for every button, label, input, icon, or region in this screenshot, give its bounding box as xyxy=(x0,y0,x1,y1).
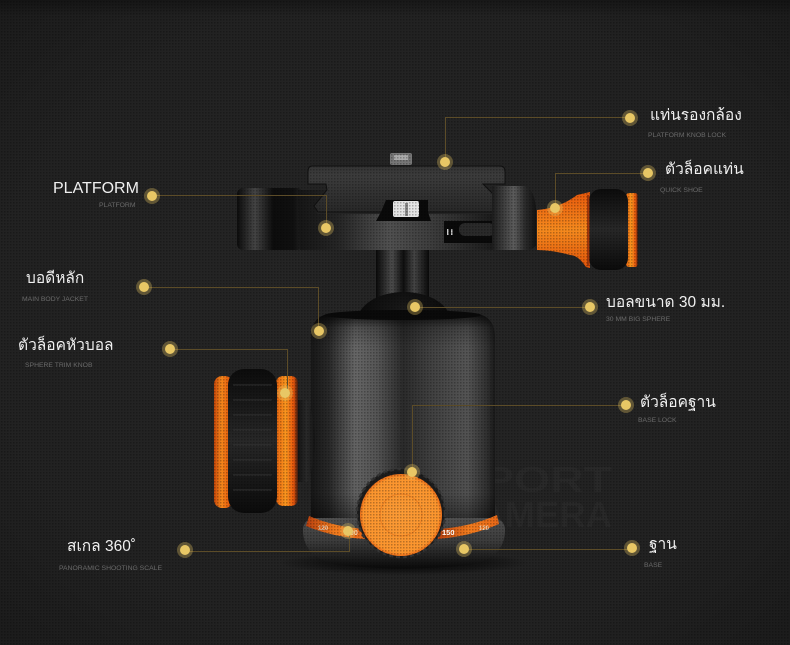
label: base lock: ตัวล็อคฐาน xyxy=(640,392,716,411)
label: platform knob lock xyxy=(648,107,742,139)
quick shoe knob xyxy=(537,189,638,270)
label: platform knob lock: แท่นรองกล้อง xyxy=(650,107,742,124)
label: main body jacket: MAIN BODY JACKET xyxy=(22,296,88,303)
sphere trim knob xyxy=(214,369,315,513)
label: sphere trim knob: SPHERE TRIM KNOB xyxy=(25,362,93,369)
label: panoramic scale: PANORAMIC SHOOTING SCALE xyxy=(59,565,162,572)
base xyxy=(303,518,505,568)
panoramic scale ring: 150 xyxy=(442,528,455,537)
lever slot xyxy=(444,221,495,243)
marker: base lock label xyxy=(618,397,634,413)
label: quick shoe: ตัวล็อคแท่น xyxy=(665,159,744,178)
panoramic scale ring: 120 xyxy=(318,526,329,532)
product: ball head xyxy=(214,153,638,575)
label: quick shoe: QUICK SHOE xyxy=(660,187,703,194)
platform top plate xyxy=(308,166,505,212)
label: panoramic scale xyxy=(59,538,162,572)
label: base lock: BASE LOCK xyxy=(638,417,677,424)
label: base xyxy=(644,536,677,569)
stem and ball xyxy=(357,248,451,352)
label: panoramic scale: สเกล 360˚ xyxy=(67,538,136,555)
main body xyxy=(311,310,495,525)
marker: knob lock on plate xyxy=(437,154,453,170)
leader lines xyxy=(144,118,648,552)
platform clamp xyxy=(237,188,500,250)
marker: main body label xyxy=(136,279,152,295)
marker: platform on clamp xyxy=(318,220,334,236)
marker: big sphere on ball xyxy=(407,299,423,315)
watermark xyxy=(452,459,612,535)
panoramic scale ring: 90 xyxy=(350,530,358,537)
label: platform: PLATFORM xyxy=(53,180,139,197)
labels xyxy=(18,107,744,572)
marker: platform left xyxy=(144,188,160,204)
label: sphere trim knob xyxy=(18,335,114,369)
marker: trim knob xyxy=(277,385,293,401)
marker: scale label xyxy=(177,542,193,558)
label: platform: PLATFORM xyxy=(99,202,136,209)
marker: base lock xyxy=(404,464,420,480)
marker: scale ring xyxy=(340,523,356,539)
center clamp opening xyxy=(376,200,431,221)
marker: base xyxy=(456,541,472,557)
label: big sphere: 30 MM BIG SPHERE xyxy=(606,316,671,323)
base lock knob xyxy=(357,469,445,557)
label: sphere trim knob: ตัวล็อคหัวบอล xyxy=(18,335,114,354)
marker: quick shoe on knob xyxy=(547,200,563,216)
marker: trim knob label xyxy=(162,341,178,357)
label: main body jacket xyxy=(22,270,88,303)
label: platform knob lock: PLATFORM KNOB LOCK xyxy=(648,132,727,139)
label: big sphere: บอลขนาด 30 มม. xyxy=(606,294,725,311)
watermark: SPORT xyxy=(452,459,612,500)
clamp right end cap xyxy=(492,186,536,250)
watermark: CAMERA xyxy=(452,494,612,535)
label: platform xyxy=(53,180,139,209)
mounting screw xyxy=(390,153,412,165)
panoramic scale ring xyxy=(306,515,499,539)
ground shadow xyxy=(279,551,529,575)
label: quick shoe xyxy=(660,159,744,194)
label: big sphere xyxy=(606,294,725,323)
marker: knob lock label xyxy=(622,110,638,126)
marker: main body xyxy=(311,323,327,339)
marker: base label xyxy=(624,540,640,556)
label: base: ฐาน xyxy=(649,536,677,553)
marker dots xyxy=(136,110,656,558)
marker: big sphere label xyxy=(582,299,598,315)
label: main body jacket: บอดีหลัก xyxy=(26,270,84,287)
label: base: BASE xyxy=(644,562,663,569)
marker: quick shoe label xyxy=(640,165,656,181)
label: base lock xyxy=(638,392,716,424)
panoramic scale ring: 120 xyxy=(479,526,490,532)
